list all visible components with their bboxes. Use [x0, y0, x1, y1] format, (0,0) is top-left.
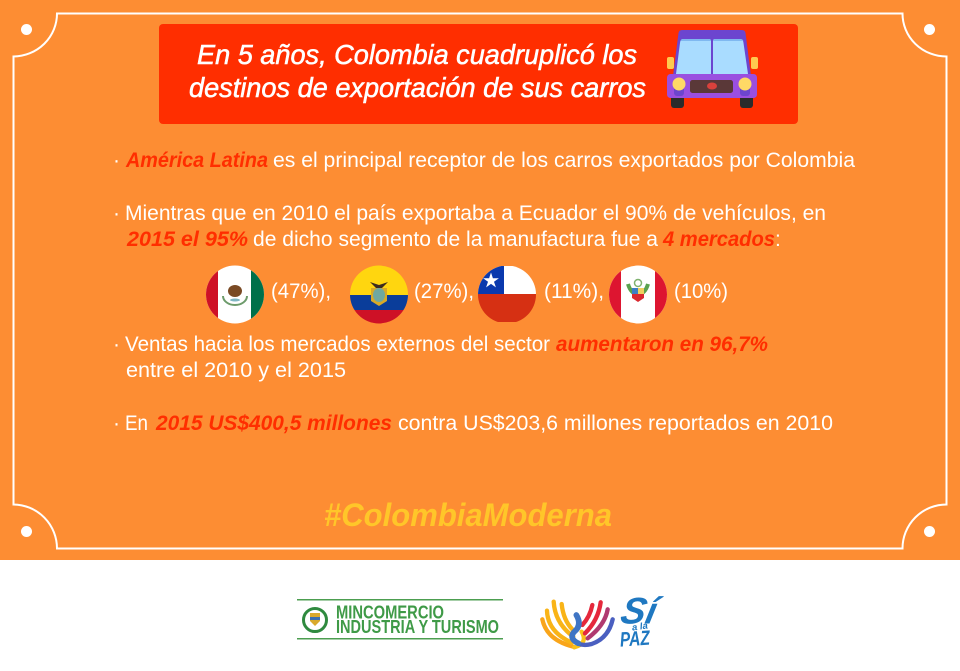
label: Ecuador share: (27%),: [414, 280, 474, 303]
bullet: sales growth: aumentaron en 96,7%: [556, 333, 768, 356]
bullet: 2010 vs 2015 markets: [113, 202, 826, 251]
bullet: América Latina: es el principal receptor de los carros exportados por Colombia: [273, 149, 855, 172]
wordmark: PAZ: [619, 627, 652, 652]
bullet: sales values: ·: [113, 412, 120, 435]
bullet: sales values: [113, 412, 833, 435]
icon: hands: [542, 602, 613, 647]
bullet: América Latina: ·: [113, 149, 120, 172]
title banner: [159, 24, 798, 124]
bullet: sales growth: Ventas hacia los mercados externos del sector: [125, 333, 550, 356]
bullet: sales growth: ·: [113, 333, 120, 356]
bullet: América Latina: América Latina: [125, 149, 268, 172]
label: Chile share: (11%),: [544, 280, 604, 303]
label: Mexico share: (47%),: [271, 280, 331, 303]
icon: flag of Mexico: [206, 265, 264, 324]
label: Peru share: (10%): [674, 280, 728, 303]
bullet: sales values: contra US$203,6 millones reportados en 2010: [398, 412, 833, 435]
title text: En 5 años, Colombia cuadruplicó los: [197, 39, 637, 70]
bullet: 2010 vs 2015 markets: :: [775, 228, 781, 251]
title text: [189, 39, 646, 103]
bullet: sales growth: [113, 333, 768, 382]
logo: MinComercio: [297, 599, 503, 640]
logo: Sí a la Paz: [542, 590, 666, 652]
icon: flag of Ecuador: [350, 265, 408, 325]
title text: destinos de exportación de sus carros: [189, 72, 646, 103]
bullet: sales values: En: [125, 412, 148, 435]
wordmark: a la: [631, 621, 648, 633]
logo: MinComercio: INDUSTRIA Y TURISMO: [336, 617, 499, 637]
bullet: 2010 vs 2015 markets: 2015 el 95%: [126, 228, 248, 251]
icon: coat of arms: [304, 608, 326, 632]
icon: flag of Peru: [609, 265, 667, 324]
bullet: 2010 vs 2015 markets: 4 mercados: [662, 228, 775, 251]
bullet: 2010 vs 2015 markets: de dicho segmento de la manufactura fue a: [253, 228, 658, 251]
bullet: sales values: 2015 US$400,5 millones: [155, 412, 392, 435]
wordmark: [617, 590, 666, 652]
logo: MinComercio: MINCOMERCIO: [336, 602, 444, 622]
bullet: sales growth: entre el 2010 y el 2015: [126, 359, 346, 382]
hashtag: #ColombiaModerna: [324, 497, 612, 533]
icon: purple truck: [667, 30, 758, 108]
wordmark: Sí: [617, 590, 666, 631]
flags row: [206, 265, 728, 325]
bullet: 2010 vs 2015 markets: Mientras que en 2010 el país exportaba a Ecuador el 90% de vehículos, en: [125, 202, 826, 225]
decorative frame: [14, 14, 946, 548]
icon: flag of Chile: [478, 266, 536, 322]
bullet: 2010 vs 2015 markets: ·: [113, 202, 120, 225]
